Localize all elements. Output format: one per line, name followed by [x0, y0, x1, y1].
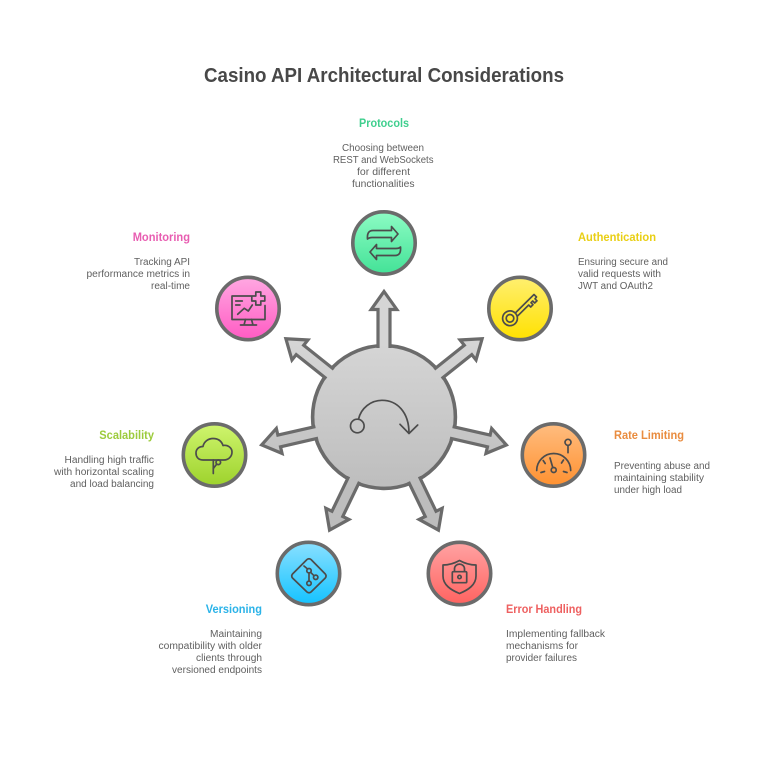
icon: git branch diamond: [277, 542, 340, 605]
arrow: to rate limiting: [448, 420, 509, 457]
text: protocols description: Choosing between: [342, 143, 424, 154]
text: authentication description: [578, 257, 668, 292]
icon: key: [489, 277, 551, 340]
text: error handling description: mechanisms for: [506, 641, 579, 652]
text: rate limiting description: [614, 461, 710, 496]
heading: rate limiting: Rate Limiting: [614, 428, 684, 442]
arrow: to authentication: [430, 329, 490, 384]
text: scalability description: [53, 455, 154, 490]
arrow: to versioning: [318, 474, 366, 536]
text: rate limiting description: maintaining stability: [614, 473, 704, 484]
text: monitoring description: Tracking API: [134, 257, 190, 268]
text: monitoring description: performance metrics in: [86, 269, 190, 280]
icon: cloud on stem: [183, 424, 246, 486]
text: error handling description: provider failures: [506, 653, 577, 664]
panel: versioning: [158, 542, 340, 676]
icon: protocols exchange arrows: [353, 212, 415, 274]
text: rate limiting description: under high load: [614, 485, 682, 496]
text: versioning description: versioned endpoints: [172, 665, 262, 676]
icon: curved process arrow: [350, 400, 418, 434]
panel: error handling: [428, 542, 606, 664]
text: versioning description: Maintaining: [210, 629, 262, 640]
text: monitoring description: [86, 257, 190, 292]
panel: monitoring: [86, 230, 279, 340]
title: Casino API Architectural Considerations: [204, 65, 564, 87]
text: protocols description: [333, 143, 434, 190]
panel: protocols: [333, 116, 434, 274]
text: protocols description: for different: [357, 167, 410, 178]
arrow: to protocols: [371, 292, 397, 348]
heading: versioning: Versioning: [206, 602, 262, 616]
text: scalability description: Handling high traffic: [64, 455, 154, 466]
arrow: to scalability: [259, 420, 320, 457]
heading: authentication: Authentication: [578, 230, 656, 244]
panel: authentication: [489, 230, 668, 340]
icon: monitor with chart and plus: [217, 277, 279, 340]
text: error handling description: [506, 629, 606, 664]
arrow: to monitoring: [278, 329, 338, 384]
panel: scalability: [53, 424, 246, 490]
panel: rate limiting: [522, 424, 710, 496]
text: rate limiting description: Preventing abuse and: [614, 461, 710, 472]
heading: protocols: Protocols: [359, 116, 409, 130]
text: monitoring description: real-time: [151, 281, 190, 292]
heading: scalability: Scalability: [99, 428, 154, 442]
text: protocols description: REST and WebSockets: [333, 155, 434, 166]
text: authentication description: JWT and OAuth2: [578, 281, 653, 292]
text: scalability description: and load balancing: [70, 479, 154, 490]
text: versioning description: clients through: [196, 653, 262, 664]
heading: error handling: Error Handling: [506, 602, 582, 616]
central hub with radial arrows: [259, 292, 509, 536]
heading: monitoring: Monitoring: [133, 230, 190, 244]
text: authentication description: valid requests with: [578, 269, 661, 280]
icon: speed gauge: [522, 424, 585, 486]
icon: shield with lock: [428, 542, 491, 605]
text: scalability description: with horizontal scaling: [53, 467, 154, 478]
text: error handling description: Implementing fallback: [506, 629, 606, 640]
hub circle: [313, 346, 455, 488]
text: authentication description: Ensuring secure and: [578, 257, 668, 268]
text: versioning description: [158, 629, 263, 676]
text: protocols description: functionalities: [352, 179, 414, 190]
arrow: to error handling: [402, 474, 450, 536]
text: versioning description: compatibility with older: [158, 641, 263, 652]
